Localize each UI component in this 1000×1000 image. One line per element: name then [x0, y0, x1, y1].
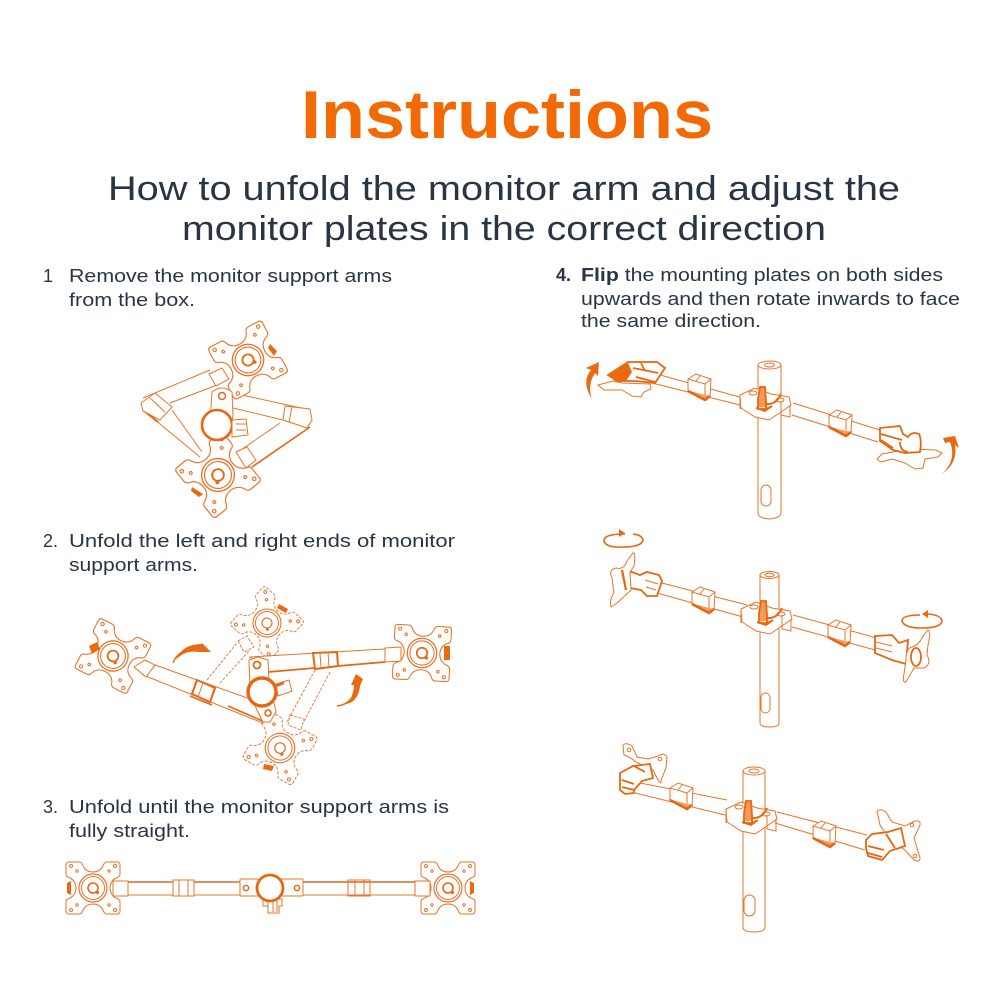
- top plate: [208, 320, 288, 400]
- right clamp: [866, 828, 905, 860]
- right plate: [421, 862, 475, 914]
- title: Instructions: [301, 77, 713, 153]
- dashed folded arms: [207, 586, 330, 786]
- arms: [657, 582, 877, 650]
- left plate flat: [598, 362, 665, 397]
- subtitle: monitor plates in the correct direction: [182, 210, 826, 248]
- step 3 text: [43, 797, 449, 841]
- knobs: [268, 344, 277, 356]
- step 2 text: 2.: [43, 531, 58, 551]
- step 2 text: [43, 531, 455, 575]
- pole: [743, 767, 765, 932]
- subtitle: [108, 170, 900, 248]
- left plate: [623, 744, 667, 783]
- arms: [652, 373, 880, 442]
- straight arm: [120, 882, 420, 895]
- rotate arrow: [902, 610, 942, 628]
- arrow: [337, 674, 363, 706]
- step 4 text: Flip the mounting plates on both sides: [581, 265, 943, 285]
- center hub and ring: [209, 388, 233, 436]
- subtitle: How to unfold the monitor arm and adjust the: [108, 170, 900, 208]
- step 4 text: the same direction.: [581, 311, 761, 331]
- arrow: [586, 362, 599, 399]
- step 4 text: [556, 265, 960, 331]
- step 3 diagram: straight arm: [66, 862, 475, 914]
- right clamp: [875, 635, 908, 664]
- step 2 text: Unfold the left and right ends of monitor: [69, 531, 455, 551]
- pole: [758, 361, 781, 519]
- left plate: [66, 862, 120, 914]
- step 3 text: Unfold until the monitor support arms is: [69, 797, 449, 817]
- right plate: [877, 810, 920, 861]
- left clamp: [620, 764, 653, 794]
- left clamp: [626, 570, 662, 596]
- step 1 text: from the box.: [69, 290, 195, 310]
- step 4 text: 4.: [556, 265, 571, 285]
- left plate: [610, 553, 635, 607]
- arms: [635, 782, 867, 850]
- step 1 text: 1: [43, 266, 53, 286]
- right plate flat: [877, 426, 942, 469]
- center hub: [240, 879, 303, 896]
- rotate arrow: [604, 529, 643, 547]
- arrow: [942, 436, 959, 474]
- step 2 diagram: unfolding arms: [74, 586, 452, 786]
- step 1 text: [43, 266, 392, 310]
- right plate: [392, 624, 452, 682]
- step 4 text: upwards and then rotate inwards to face: [581, 289, 960, 309]
- step 1 diagram: folded arms: [141, 320, 312, 519]
- step 4 diagram B: rotate plates inward: [604, 529, 942, 727]
- step 1 text: Remove the monitor support arms: [69, 266, 392, 286]
- center hub and ring: [249, 657, 276, 722]
- step 3 text: fully straight.: [69, 821, 190, 841]
- step 3 text: 3.: [43, 797, 58, 817]
- step 2 text: support arms.: [69, 555, 198, 575]
- pole: [760, 572, 779, 727]
- step 4 diagram A: flip plates upward: [586, 361, 959, 519]
- bottom plate: [174, 431, 262, 519]
- left arm: [143, 665, 263, 723]
- right plate: [903, 630, 930, 682]
- right arm: [250, 649, 385, 672]
- step 4 diagram C: plates facing same direction: [620, 744, 920, 932]
- arrow: [173, 642, 211, 663]
- left plate: [74, 618, 152, 694]
